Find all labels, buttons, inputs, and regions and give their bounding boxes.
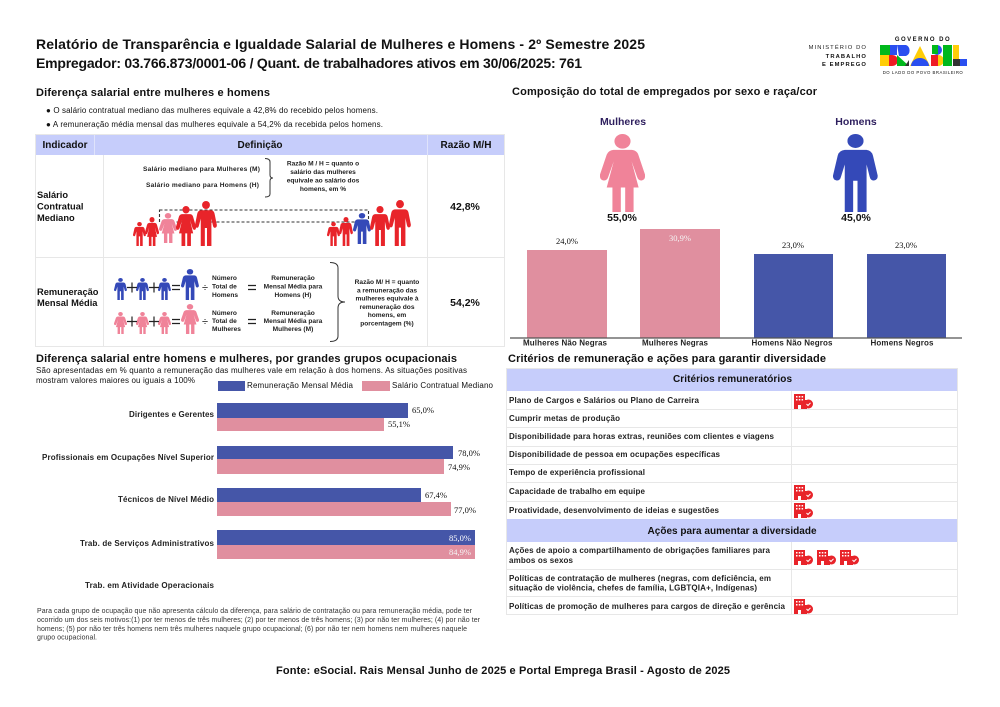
definition: remuneração média mulheres: Número bbox=[212, 310, 237, 317]
definition: razão remuneração: remuneração dos bbox=[360, 304, 415, 311]
text block: footnote: Para cada grupo de ocupação que não apresenta cálculo da diferença, para salário de contratação ou para remuneração média, pode ter bbox=[37, 608, 473, 615]
definition: razão remuneração: Razão M/ H = quanto bbox=[355, 279, 419, 286]
bar chart: grupos ocupacionais: 55,1% bbox=[388, 419, 410, 429]
panel: composição women bbox=[600, 116, 646, 224]
chart legend bbox=[218, 381, 494, 391]
text block: footnote bbox=[37, 608, 481, 642]
logo: ministério: TRABALHO bbox=[826, 54, 867, 60]
definition: razão remuneração: porcentagem (%) bbox=[360, 320, 414, 328]
logo: ministério bbox=[809, 44, 867, 68]
bar chart: grupos ocupacionais: 74,9% bbox=[448, 462, 470, 472]
definition: remuneração média homens: Número bbox=[212, 275, 237, 282]
definition: salário mediano bbox=[143, 158, 360, 197]
criteria labels bbox=[509, 396, 775, 515]
table header labels: Indicador bbox=[42, 140, 88, 151]
bar chart: grupos ocupacionais: 77,0% bbox=[454, 505, 476, 515]
row label: salário contratual mediano bbox=[37, 190, 84, 223]
bar chart: composição por raça/cor: Mulheres Negras bbox=[642, 338, 709, 348]
logo: governo do brasil bbox=[880, 37, 967, 75]
definition: salário mediano: homens, em % bbox=[300, 186, 346, 193]
bar chart: composição por raça/cor: Homens Negros bbox=[870, 338, 934, 348]
row label: remuneração mensal média: Mensal Média bbox=[37, 298, 98, 308]
chart legend: Salário Contratual Mediano bbox=[392, 381, 494, 390]
text block: footnote: homens; (5) por não ter três homens nem três mulheres naquele grupo ocupacional; (6) por não ter nem homens nem mulheres naquele bbox=[37, 626, 467, 633]
icons: people salary ranking bbox=[133, 200, 411, 246]
panel: composição men: Homens bbox=[835, 116, 877, 128]
table header labels: Definição bbox=[238, 140, 282, 151]
text block: bullets: ● A remuneração média mensal das mulheres equivale a 54,2% da recebida pelos homens. bbox=[46, 120, 383, 129]
criteria labels: Disponibilidade de pessoa em ocupações específicas bbox=[509, 450, 721, 459]
text block: chart description bbox=[36, 366, 467, 385]
definition: salário mediano: Salário mediano para Mulheres (M) bbox=[143, 166, 260, 173]
text block: chart description: mostram valores maiores ou iguais a 100% bbox=[36, 376, 195, 385]
text block: bullets: ● O salário contratual mediano das mulheres equivale a 42,8% do recebido pelos homens. bbox=[46, 106, 378, 115]
subheading: ações: Ações para aumentar a diversidade bbox=[648, 526, 817, 537]
definition: razão remuneração: a remuneração das bbox=[357, 287, 417, 294]
action labels: Ações de apoio a compartilhamento de obrigações familiares para bbox=[509, 546, 771, 555]
bar chart: composição por raça/cor: 23,0% bbox=[782, 240, 804, 250]
source note: Fonte: eSocial. Rais Mensal Junho de 2025 e Portal Emprega Brasil - Agosto de 2025 bbox=[276, 665, 730, 677]
definition: salário mediano: Salário mediano para Homens (H) bbox=[146, 182, 259, 189]
heading: diferença salarial: Diferença salarial entre mulheres e homens bbox=[36, 87, 270, 99]
definition: razão remuneração: mulheres equivale à bbox=[355, 296, 419, 303]
heading: critérios: Critérios de remuneração e ações para garantir diversidade bbox=[508, 353, 826, 365]
row label: salário contratual mediano: Mediano bbox=[37, 213, 75, 223]
panel: indicator table bbox=[35, 134, 505, 347]
title bbox=[36, 36, 645, 71]
definition: remuneração média mulheres: Total de bbox=[212, 318, 237, 325]
logo: ministério: MINISTÉRIO DO bbox=[809, 44, 867, 51]
bar chart: grupos ocupacionais: 84,9% bbox=[449, 547, 471, 557]
action labels: Políticas de contratação de mulheres (negras, com deficiência, em bbox=[509, 574, 771, 583]
bar chart: grupos ocupacionais: Dirigentes e Gerentes bbox=[129, 410, 215, 419]
bar chart: composição por raça/cor: 30,9% bbox=[669, 233, 691, 243]
action labels bbox=[509, 546, 786, 611]
bar chart: grupos ocupacionais: Trab. de Serviços Administrativos bbox=[80, 539, 215, 548]
bar chart: composição por raça/cor: Homens Não Negros bbox=[752, 338, 833, 348]
row label: remuneração mensal média: Remuneração bbox=[37, 287, 99, 297]
definition: remuneração média homens: Total de bbox=[212, 284, 237, 290]
title: Empregador: 03.766.873/0001-06 / Quant. de trabalhadores ativos em 30/06/2025: 761 bbox=[36, 55, 582, 71]
bar chart: grupos ocupacionais: 65,0% bbox=[412, 405, 434, 415]
text block: bullets bbox=[46, 106, 383, 129]
heading: diferença por grupos: Diferença salarial entre homens e mulheres, por grandes grupos ocupacionais bbox=[36, 353, 457, 365]
definition: remuneração média homens: ÷ bbox=[202, 282, 208, 294]
action labels: situação de violência, chefes de família, LGBTQIA+, Indígenas) bbox=[509, 584, 757, 592]
definition: remuneração média homens: Homens bbox=[212, 292, 238, 299]
definition: salário mediano: equivale ao salário dos bbox=[287, 178, 360, 184]
panel: composição men: 45,0% bbox=[841, 212, 872, 224]
bar chart: grupos ocupacionais: 85,0% bbox=[449, 533, 471, 543]
bar chart: grupos ocupacionais: Profissionais em Ocupações Nível Superior bbox=[42, 453, 214, 462]
criteria labels: Disponibilidade para horas extras, reuniões com clientes e viagens bbox=[509, 432, 775, 441]
logo: governo do brasil: GOVERNO DO bbox=[895, 37, 951, 43]
definition: salário mediano: Razão M / H = quanto o bbox=[287, 160, 359, 168]
row label: salário contratual mediano: Contratual bbox=[37, 202, 84, 212]
bar chart: composição por raça/cor bbox=[510, 229, 962, 348]
title: Relatório de Transparência e Igualdade Salarial de Mulheres e Homens - 2º Semestre 2025 bbox=[36, 36, 645, 52]
criteria labels: Plano de Cargos e Salários ou Plano de Carreira bbox=[509, 396, 700, 405]
criteria labels: Capacidade de trabalho em equipe bbox=[509, 487, 646, 496]
row label: salário contratual mediano: Salário bbox=[37, 190, 68, 200]
definition: remuneração média homens bbox=[114, 269, 323, 300]
logo: ministério: E EMPREGO bbox=[822, 62, 867, 68]
bar chart: composição por raça/cor: 24,0% bbox=[556, 236, 578, 246]
icon: action company marks bbox=[794, 550, 859, 614]
bar chart: grupos ocupacionais: 67,4% bbox=[425, 490, 447, 500]
text block: chart description: São apresentadas em % quanto a remuneração das mulheres vale em relação à dos homens. As situações positivas bbox=[36, 366, 467, 375]
definition: razão remuneração: homens, em bbox=[368, 312, 406, 319]
criteria labels: Proatividade, desenvolvimento de ideias e sugestões bbox=[509, 506, 720, 515]
bar chart: composição por raça/cor: 23,0% bbox=[895, 240, 917, 250]
bar chart: composição por raça/cor: Mulheres Não Negras bbox=[523, 338, 608, 348]
action labels: Políticas de promoção de mulheres para cargos de direção e gerência bbox=[509, 602, 786, 611]
definition: remuneração média mulheres: Remuneração bbox=[271, 310, 315, 317]
panel: critérios table bbox=[506, 368, 958, 615]
logo: governo do brasil: DO LADO DO POVO BRASILEIRO bbox=[883, 70, 963, 75]
definition: remuneração média mulheres: Mensal Média para bbox=[264, 318, 323, 325]
definition: remuneração média homens: Mensal Média para bbox=[264, 284, 323, 290]
table header labels: Razão M/H bbox=[440, 140, 492, 151]
criteria labels: Cumprir metas de produção bbox=[509, 414, 620, 423]
chart legend: Remuneração Mensal Média bbox=[247, 381, 354, 390]
criteria labels: Tempo de experiência profissional bbox=[509, 468, 645, 477]
panel: composição women: 55,0% bbox=[607, 212, 638, 224]
definition: remuneração média mulheres: Mulheres bbox=[212, 326, 241, 333]
bar chart: grupos ocupacionais bbox=[42, 403, 480, 590]
definition: remuneração média homens: Remuneração bbox=[271, 275, 315, 282]
value: 54,2%: 54,2% bbox=[450, 297, 481, 309]
definition: salário mediano: salário das mulheres bbox=[290, 169, 356, 176]
text block: footnote: grupo ocupacional. bbox=[37, 634, 97, 642]
table header labels bbox=[42, 140, 492, 151]
heading: composição: Composição do total de empregados por sexo e raça/cor bbox=[512, 86, 818, 98]
definition: remuneração média mulheres bbox=[114, 304, 323, 334]
bar chart: grupos ocupacionais: Trab. em Atividade Operacionais bbox=[85, 581, 215, 590]
panel: composição women: Mulheres bbox=[600, 116, 646, 128]
definition: remuneração média mulheres: ÷ bbox=[202, 316, 208, 328]
text block: footnote: ocorrido um dos seis motivos:(1) por ter menos de três mulheres; (2) por ter menos de três homens; (3) por não ter mulheres; (4) por não ter bbox=[37, 617, 481, 624]
definition: remuneração média homens: Homens (H) bbox=[274, 292, 312, 299]
panel: composição men bbox=[833, 116, 878, 224]
subheading: critérios remuneratórios: Critérios remuneratórios bbox=[673, 374, 792, 385]
definition: razão remuneração bbox=[330, 262, 419, 342]
icon: company check marks bbox=[794, 394, 813, 518]
definition: remuneração média mulheres: Mulheres (M) bbox=[273, 326, 313, 333]
bar chart: grupos ocupacionais: Técnicos de Nível Médio bbox=[118, 495, 214, 504]
row label: remuneração mensal média bbox=[37, 287, 99, 308]
action labels: ambos os sexos bbox=[509, 556, 574, 565]
bar chart: grupos ocupacionais: 78,0% bbox=[458, 448, 480, 458]
value: 42,8%: 42,8% bbox=[450, 201, 481, 213]
